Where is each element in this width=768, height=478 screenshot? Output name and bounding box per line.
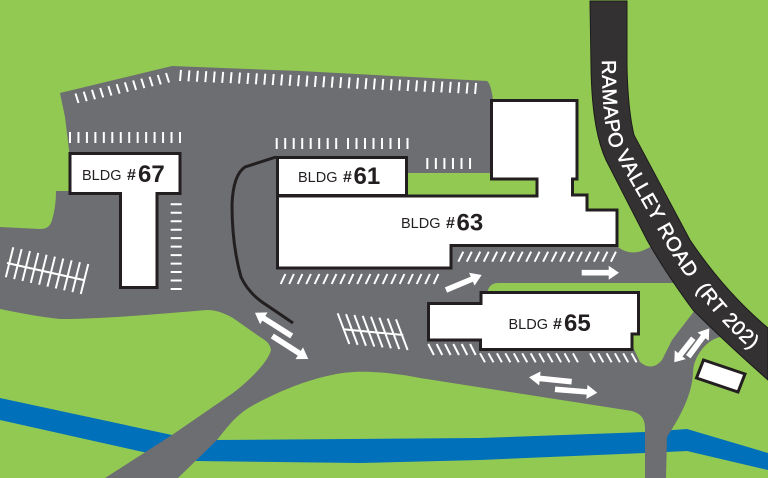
arrow: east below building 65 (554, 382, 598, 400)
arrow: entrance northeast (683, 324, 715, 361)
parking row: top (180, 70, 476, 94)
label: building 65: BLDG (508, 317, 548, 333)
parking lot: central double row (338, 313, 408, 350)
parking stripes (6, 70, 636, 362)
road label: RAMAPO VALLEY ROAD (RT 202) (602, 61, 758, 350)
arrow: toward building 63 lot (443, 269, 484, 296)
parking row: below building 65 left wing (428, 344, 476, 355)
parking row: above building 61 (277, 138, 408, 149)
building 61 (278, 158, 406, 196)
parking row: above building 67 (70, 132, 180, 143)
river (0, 398, 768, 470)
traffic arrows (251, 266, 715, 400)
arrow: entrance drive southeast (269, 330, 312, 365)
arrow: entrance drive northwest (251, 307, 295, 342)
parking row: below building 63 left (281, 274, 438, 284)
arrow: west below building 65 (528, 370, 572, 389)
label: building 61: # (343, 169, 352, 186)
parking row: beside building 61 (427, 158, 470, 169)
label: building 63: # (446, 215, 455, 232)
grass island by building 65 (487, 283, 695, 367)
driveway curve line (232, 157, 293, 323)
building 65 (428, 292, 638, 350)
label: building 67: 67 (138, 161, 165, 188)
label: building 61: BLDG (298, 170, 338, 186)
parking row: beside building 67 (171, 204, 182, 289)
label: building 67: BLDG (82, 168, 122, 184)
Ramapo Valley Road (590, 0, 768, 380)
small gatehouse building (696, 360, 745, 392)
label: building 65: # (553, 316, 562, 333)
parking lot: west double row (6, 247, 88, 294)
label: building 61: 61 (354, 163, 380, 190)
label: building 65: 65 (564, 310, 591, 337)
label: building 63: 63 (456, 210, 483, 236)
building 63 (278, 100, 617, 268)
parking row: below building 63 right (458, 252, 616, 262)
parking row: below building 65 (480, 353, 636, 362)
label: building 67: # (127, 167, 136, 184)
label: building 63: BLDG (401, 216, 440, 232)
arrow: exit east (582, 266, 619, 280)
building 67 (70, 154, 180, 288)
parking row: upper left angled (76, 73, 169, 103)
arrow: entrance southwest (669, 334, 699, 367)
